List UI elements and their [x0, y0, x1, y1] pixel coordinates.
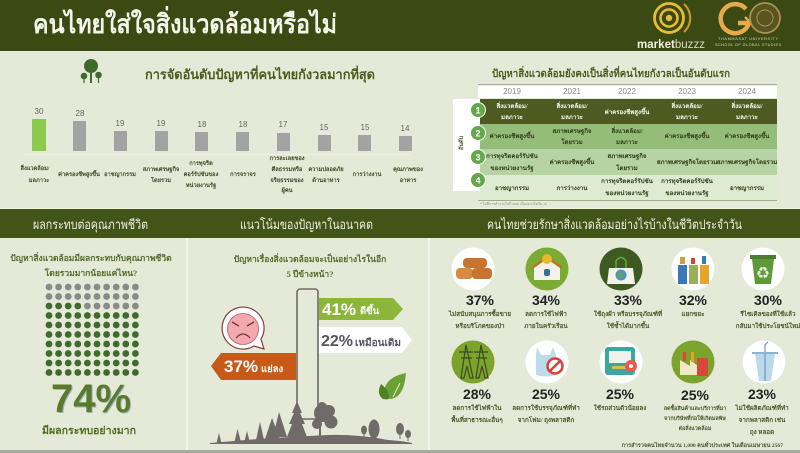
panel: environment top issue table: มลภาวะ [736, 114, 758, 121]
logo: marketbuzzz: marketbuzzz [637, 39, 705, 51]
panel: environment top issue table: สภาพเศรษฐกิจ [552, 127, 592, 135]
logo: GO Thammasat [715, 3, 781, 47]
panel: environment top issue table: อันดับ [458, 135, 465, 150]
panel: environment top issue table: อาชญากรรม [495, 185, 529, 192]
panel: environment top issue table: * ไม่มีการสำรวจในปี 2020 เนื่องจากโควิด-19 [480, 201, 547, 206]
panel: environment top issue table: สภาพเศรษฐกิจ [607, 152, 647, 160]
item 25% plastic bag [512, 340, 580, 424]
item 30% recycle bin: ♻ [757, 266, 769, 280]
item 34% electricity: ภายในครัวเรือน [524, 322, 568, 330]
item 25% plastic bag: ลดการใช้บรรจุภัณฑ์ที่ทำ [512, 403, 580, 412]
bar chart: 17 [279, 120, 288, 129]
panel: environment top issue table: 3 [475, 152, 481, 162]
panel: environment top issue table: 2019 [503, 87, 521, 96]
item 25% factory: จากบริษัทที่ก่อให้เกิดมลพิษ [664, 414, 726, 422]
icon: trees [81, 59, 102, 83]
item 25% plastic bag: จากโฟม/ ถุงพลาสติก [518, 416, 574, 424]
item 25% bus [594, 340, 646, 412]
forest silhouette [210, 401, 412, 444]
item 30% recycle bin: กลับมาใช้ประโยชน์ใหม่ [736, 321, 800, 330]
panel: environment top issue table: สิ่งแวดล้อม/ [611, 126, 643, 135]
item 23% plastic cup: ถุง หลอด [750, 429, 774, 436]
bar chart: 18 [239, 120, 248, 129]
panel: daily actions [448, 248, 800, 449]
bar chart: ด้านอาหาร [312, 176, 341, 184]
bar chart: 19 [116, 119, 125, 128]
bar chart: 18 [198, 120, 207, 129]
arrow: better 41%: ดีขึ้น [360, 303, 380, 317]
bar chart: จริยธรรมของ [270, 177, 304, 184]
bar chart: 14 [401, 124, 410, 133]
question text [10, 251, 172, 278]
bar chart: 19 [157, 119, 166, 128]
arrow: same 22%: 22% [321, 333, 353, 350]
item 25% bus: 25% [606, 386, 635, 402]
item 33% reusable bag [594, 248, 662, 330]
item 25% factory: ลดซื้อสินค้าและบริการที่มา [664, 403, 726, 412]
panel: environment top issue table: ค่าครองชีพสูงขึ้น [725, 130, 770, 141]
item 37% wood: 37% [466, 292, 495, 308]
panel: environment top issue table: ของหน่วยงานรัฐ [605, 189, 649, 197]
panel: environment top issue table: สภาพเศรษฐกิจโดยรวม [717, 158, 777, 166]
title: คนไทยใส่ใจสิ่งแวดล้อมหรือไม่ [33, 5, 337, 39]
item 28% power tower [451, 340, 503, 424]
question text: ปัญหาเรื่องสิ่งแวดล้อมจะเป็นอย่างไรในอีก [234, 252, 386, 265]
panel: environment top issue table: อาชญากรรม [730, 185, 764, 192]
panel: environment top issue table: มลภาวะ [501, 114, 523, 121]
panel: environment top issue table: สิ่งแวดล้อม/ [556, 101, 588, 110]
item 25% factory: ต่อสิ่งแวดล้อม [679, 424, 712, 432]
footnote: การสำรวจคนไทยจำนวน 1,000 คนทั่วประเทศ ในเดือนเมษายน 2567 [622, 441, 783, 449]
panel: environment top issue table: 2024 [738, 87, 756, 96]
panel: environment top issue table: สิ่งแวดล้อม/ [671, 101, 703, 110]
panel: environment top issue table: ของหน่วยงานรัฐ [665, 189, 709, 197]
bar chart: คอร์รัปชันของ [184, 170, 219, 178]
item 25% bus: ใช้รถส่วนตัวน้อยลง [594, 403, 646, 412]
bar chart: การทุจริต [189, 160, 213, 167]
heading: quality of life: ผลกระทบต่อคุณภาพชีวิต [33, 217, 148, 233]
panel: environment top issue table [453, 65, 777, 206]
question text [234, 252, 386, 279]
arrow: worse 37%: 37% [224, 357, 258, 376]
bar chart: ค่าครองชีพสูงขึ้น [58, 169, 100, 179]
item 23% plastic cup [734, 340, 789, 436]
item 23% plastic cup: จากพลาสติก เช่น [739, 416, 786, 424]
panel: environment top issue table: 2023 [678, 87, 696, 96]
item 28% power tower: พื้นที่สาธารณะอื่นๆ [451, 414, 503, 424]
bar chart: การจราจร [230, 171, 257, 178]
section header bands [0, 208, 800, 238]
panel: environment top issue table: สภาพเศรษฐกิจโดยรวม [657, 158, 717, 166]
item 32% waste sorting [672, 248, 714, 318]
panel: environment top issue table: 2 [475, 128, 481, 138]
panel: environment top issue table: ค่าครองชีพสูงขึ้น [550, 156, 595, 167]
bar chart: สิ่งแวดล้อม/ [20, 164, 50, 172]
icon: angry face bubble [222, 307, 264, 349]
panel: environment top issue table: 4 [475, 176, 481, 186]
item 25% factory [664, 340, 726, 432]
panel: environment top issue table: ของหน่วยงานรัฐ [490, 164, 534, 172]
panel: future trend [210, 252, 412, 444]
dot grid [46, 284, 139, 376]
arrow: same 22%: เหมือนเดิม [355, 337, 401, 349]
item 30% recycle bin [736, 248, 800, 330]
panel: environment top issue table: มลภาวะ [676, 114, 698, 121]
logo: GO Thammasat: THAMMASAT UNIVERSITY [718, 37, 778, 41]
panel: environment top issue table: ค่าครองชีพสูงขึ้น [665, 130, 710, 141]
header band [0, 0, 800, 51]
bar chart: อาหาร [400, 177, 417, 184]
item 25% factory: 25% [681, 387, 710, 403]
panel: worry ranking [20, 59, 423, 195]
logo: marketbuzzz [637, 4, 705, 51]
item 25% plastic bag: 25% [532, 386, 561, 402]
item 34% electricity: ลดการใช้ไฟฟ้า [525, 309, 567, 318]
panel: environment top issue table: สิ่งแวดล้อม/ [496, 101, 528, 110]
panel: quality of life [10, 251, 172, 437]
panel: environment top issue table: มลภาวะ [561, 114, 583, 121]
heading: future trend: แนวโน้มของปัญหาในอนาคต [240, 217, 373, 232]
panel dividers [186, 238, 430, 450]
bar chart: มลภาวะ [29, 177, 49, 184]
icon: leaf [379, 373, 406, 399]
bar chart: สภาพเศรษฐกิจ [143, 166, 179, 173]
panel: environment top issue table: การทุจริตคอร์รัปชัน [486, 152, 539, 160]
arrow: better 41%: 41% [322, 300, 356, 319]
item 32% waste sorting: แยกขยะ [682, 311, 704, 318]
item 23% plastic cup: ไม่ใช้ผลิตภัณฑ์ที่ทำ [734, 403, 789, 412]
bar chart [20, 107, 423, 195]
bar chart: 15 [361, 123, 370, 132]
bar chart: 30 [35, 107, 44, 116]
panel: environment top issue table: 2021 [563, 87, 581, 96]
bar chart: 28 [76, 109, 85, 118]
rank badges [470, 102, 486, 188]
panel: environment top issue table: 2022 [618, 87, 636, 96]
bar chart: ความปลอดภัย [308, 165, 344, 173]
bar chart: ศีลธรรมหรือ [271, 166, 303, 173]
arrow: worse 37%: แย่ลง [261, 364, 284, 375]
bar chart: 15 [320, 123, 329, 132]
item 28% power tower: ลดการใช้ไฟฟ้าใน [452, 403, 502, 412]
item 23% plastic cup: 23% [748, 386, 777, 402]
logo: GO Thammasat: SCHOOL OF GLOBAL STUDIES [715, 43, 781, 47]
item 34% electricity [524, 248, 568, 330]
panel: environment top issue table: มลภาวะ [616, 139, 638, 146]
bar chart: หน่วยงานรัฐ [186, 182, 216, 189]
item 33% reusable bag: 33% [614, 292, 643, 308]
arrow: better 41% [319, 298, 403, 320]
item 33% reusable bag: ใช้ถุงผ้า หรือบรรจุภัณฑ์ที่ [594, 309, 662, 318]
item 32% waste sorting: 32% [679, 292, 708, 308]
bar chart: ผู้คน [281, 186, 293, 195]
thermometer post [297, 289, 318, 419]
heading: ranking: การจัดอันดับปัญหาที่คนไทยกังวลมากที่สุด [145, 65, 375, 83]
panel: environment top issue table: ค่าครองชีพสูงขึ้น [605, 106, 650, 117]
panel: environment top issue table: โดยรวม [560, 138, 583, 146]
caption: มีผลกระทบอย่างมาก [42, 424, 136, 437]
question text: โดยรวมมากน้อยแค่ไหน? [44, 268, 137, 278]
item 37% wood [448, 248, 511, 330]
arrow: same 22% [319, 327, 412, 353]
question text: 5 ปีข้างหน้า? [287, 269, 333, 279]
heading: daily actions: คนไทยช่วยรักษาสิ่งแวดล้อมอย่างไรบ้างในชีวิตประจำวัน [487, 216, 742, 232]
arrow: worse 37% [211, 353, 296, 380]
item 30% recycle bin: รีไซเคิลของที่ใช้แล้ว [740, 309, 796, 318]
item 33% reusable bag: ใช้ซ้ำได้มากขึ้น [607, 320, 650, 330]
bottom strip [0, 450, 800, 453]
bar chart: อาชญากรรม [104, 171, 136, 178]
item 34% electricity: 34% [532, 292, 561, 308]
question text: ปัญหาสิ่งแวดล้อมมีผลกระทบกับคุณภาพชีวิต [10, 251, 172, 264]
item 28% power tower: 28% [463, 386, 492, 402]
panel: environment top issue table: ค่าครองชีพสูงขึ้น [490, 130, 535, 141]
panel: environment top issue table: การทุจริตคอร์รัปชัน [661, 177, 714, 185]
bar chart: การว่างงาน [353, 171, 381, 178]
panel: environment top issue table: 1 [475, 106, 481, 116]
bar chart: การละเลยของ [269, 155, 305, 162]
item 30% recycle bin: 30% [754, 292, 783, 308]
item 37% wood: ไม่สนับสนุนการซื้อขาย [448, 308, 511, 318]
bar chart: โดยรวม [150, 176, 171, 184]
panel: environment top issue table: สิ่งแวดล้อม/ [731, 101, 763, 110]
bar chart: คุณภาพของ [393, 166, 423, 173]
item 37% wood: หรือบริโภคของป่า [455, 322, 505, 330]
big number 74%: 74% [51, 377, 131, 421]
heading: table: ปัญหาสิ่งแวดล้อมยังคงเป็นสิ่งที่คนไทยกังวลเป็นอันดับแรก [492, 65, 730, 80]
panel: environment top issue table: โดยรวม [615, 164, 638, 172]
panel: environment top issue table: การทุจริตคอร์รัปชัน [601, 177, 654, 185]
panel: environment top issue table: การว่างงาน [557, 185, 588, 192]
